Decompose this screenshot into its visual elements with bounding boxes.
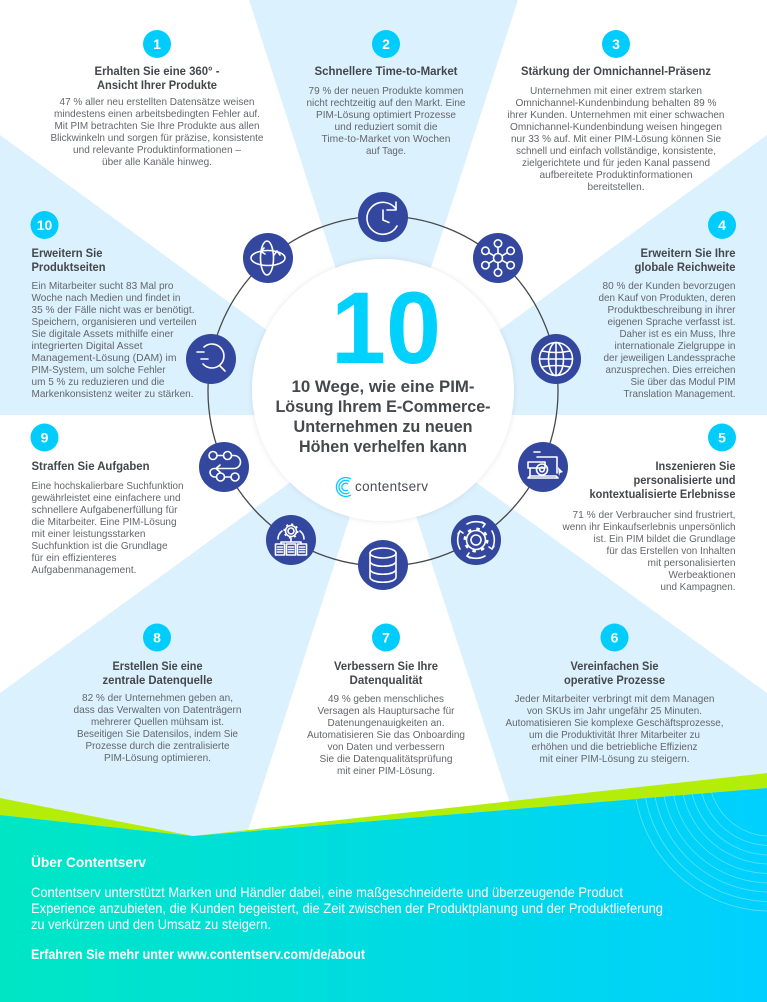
panel: 6: [506, 624, 724, 765]
body 2: auf Tage.: [366, 145, 406, 157]
badge 6: [600, 624, 628, 652]
badge 3: [602, 30, 630, 58]
main title: Höhen verhelfen kann: [299, 437, 467, 456]
badge 2: [372, 30, 400, 58]
panel: 4: [598, 211, 736, 400]
body 2: Time-to-Market von Wochen: [322, 133, 451, 145]
body 5: Werbeaktionen: [668, 569, 736, 581]
body 10: 35 % der Fälle nicht was er benötigt.: [32, 304, 194, 316]
heading 1: [94, 64, 220, 92]
heading 6: Vereinfachen Sie: [570, 659, 659, 673]
body 7: Datenungenauigkeiten an.: [328, 717, 444, 729]
badge 10: [30, 211, 58, 239]
body 3: Unternehmen mit einer extrem starken: [530, 85, 702, 97]
body 8: mehrerer Quellen mühsam ist.: [91, 716, 224, 728]
body 5: wenn ihr Einkaufserlebnis unpersönlich: [562, 521, 736, 533]
badge 5: [708, 424, 736, 452]
body 9: schnellere Aufgabenerfüllung für: [32, 504, 178, 516]
heading 4: Erweitern Sie Ihre: [640, 246, 736, 260]
badge 1: [143, 30, 171, 58]
icon: clock: [358, 192, 408, 242]
main title: 10 Wege, wie eine PIM-: [292, 377, 474, 396]
body 5: 71 % der Verbraucher sind frustriert,: [572, 509, 736, 521]
body 8: 82 % der Unternehmen geben an,: [82, 692, 233, 704]
badge 7: 7: [382, 630, 390, 646]
body 2: und reduziert somit die: [334, 121, 438, 133]
panel: 1: [50, 30, 264, 168]
body 5: [562, 509, 736, 593]
heading 10: Erweitern Sie: [32, 246, 103, 260]
body 3: schnell und einfach vollständige, konsistente,: [516, 145, 716, 157]
heading 5: kontextualisierte Erlebnisse: [590, 487, 736, 501]
panel: 8: [74, 624, 242, 764]
footer paragraph: Contentserv unterstützt Marken und Händler dabei, eine maßgeschneiderte und überzeugende Product: [31, 884, 623, 900]
footer text: [31, 854, 663, 962]
body 8: [74, 692, 242, 764]
body 6: um die Produktivität Ihrer Mitarbeiter zu: [529, 729, 700, 741]
body 9: mit einer leistungsstarken: [32, 528, 146, 540]
heading 6: operative Prozesse: [564, 673, 665, 687]
heading 8: zentrale Datenquelle: [102, 673, 213, 687]
icon: gear process: [451, 515, 501, 565]
body 9: Eine hochskalierbare Suchfunktion: [32, 480, 184, 492]
body 5: mit personalisierten: [648, 557, 736, 569]
body 7: Automatisieren Sie das Onboarding: [307, 729, 465, 741]
body 4: Produktbeschreibung in ihrer: [608, 304, 736, 316]
badge 1: 1: [153, 36, 161, 52]
body 9: gewährleistet eine einfachere und: [32, 492, 181, 504]
main title: Unternehmen zu neuen: [294, 417, 472, 436]
body 7: Versagen als Hauptursache für: [318, 705, 455, 717]
body 4: internationale Zielgruppe in: [614, 340, 736, 352]
body 9: Suchfunktion ist die Grundlage: [32, 540, 168, 552]
body 4: anzusprechen. Dies erreichen: [606, 364, 736, 376]
main title: Lösung Ihrem E-Commerce-: [276, 397, 490, 416]
heading 2: Schnellere Time-to-Market: [314, 64, 458, 78]
body 1: [50, 96, 264, 168]
badge 9: [30, 424, 58, 452]
heading 7: [334, 659, 438, 687]
body 6: von SKUs im Jahr ungefähr 25 Minuten.: [527, 705, 702, 717]
heading 7: Verbessern Sie Ihre: [334, 659, 438, 673]
body 7: mit einer PIM-Lösung.: [337, 765, 435, 777]
body 8: Prozesse durch die zentralisierte: [86, 740, 230, 752]
body 3: zielgerichtete und für jeden Kanal passend: [522, 157, 710, 169]
body 8: PIM-Lösung optimieren.: [104, 752, 211, 764]
body 7: Sie die Datenqualitätsprüfung: [320, 753, 453, 765]
body 2: [306, 85, 466, 157]
body 2: PIM-Lösung optimiert Prozesse: [316, 109, 456, 121]
body 1: Blickwinkeln und sorgen für präzise, konsistente: [50, 132, 264, 144]
body 9: für ein effizienteres: [32, 552, 116, 564]
heading 5: [590, 459, 736, 501]
badge 5: 5: [718, 430, 726, 446]
body 3: ihrer Kunden. Unternehmen mit einer schwachen: [508, 109, 725, 121]
body 3: bereitstellen.: [588, 181, 644, 193]
badge 8: 8: [153, 630, 161, 646]
body 2: nicht rechtzeitig auf den Markt. Eine: [306, 97, 466, 109]
body 4: der jeweiligen Landessprache: [604, 352, 736, 364]
heading 4: [634, 246, 736, 274]
heading 1: Ansicht Ihrer Produkte: [97, 78, 217, 92]
body 10: Woche nach Medien und findet in: [32, 292, 181, 304]
main title: [276, 377, 490, 456]
badge 7: [372, 624, 400, 652]
icon: network: [473, 233, 523, 283]
body 6: Automatisieren Sie komplexe Geschäftsprozesse,: [506, 717, 724, 729]
body 3: [508, 85, 725, 193]
heading 3: Stärkung der Omnichannel-Präsenz: [521, 64, 711, 78]
panel: 5: [562, 424, 736, 593]
contentserv logo: [336, 478, 428, 496]
body 10: Ein Mitarbeiter sucht 83 Mal pro: [32, 280, 174, 292]
body 6: [506, 693, 724, 765]
body 4: Translation Management.: [624, 388, 736, 400]
contentserv logo: contentserv: [355, 479, 428, 494]
badge 2: 2: [382, 36, 390, 52]
body 1: und relevante Produktinformationen –: [73, 144, 241, 156]
body 7: 49 % geben menschliches: [328, 693, 444, 705]
body 4: Sie über das Modul PIM: [630, 376, 736, 388]
badge 8: [143, 624, 171, 652]
panel: 2: [306, 30, 466, 157]
body 5: für das Erstellen von Inhalten: [606, 545, 736, 557]
badge 4: 4: [718, 217, 726, 233]
body 1: Mit PIM betrachten Sie Ihre Produkte aus allen: [54, 120, 260, 132]
heading 8: Erstellen Sie eine: [112, 659, 203, 673]
body 10: Sie digitale Assets mithilfe einer: [32, 328, 174, 340]
body 6: erhöhen und die betriebliche Effizienz: [532, 741, 698, 753]
body 7: von Daten und verbessern: [328, 741, 445, 753]
body 4: 80 % der Kunden bevorzugen: [602, 280, 736, 292]
body 3: Omnichannel-Kundenbindung behalten 89 %: [516, 97, 716, 109]
body 6: Jeder Mitarbeiter verbringt mit dem Managen: [514, 693, 715, 705]
icon: central data source: [266, 515, 316, 565]
panel: 9: [30, 424, 184, 576]
heading 9: Straffen Sie Aufgaben: [32, 459, 150, 473]
body 10: Speichern, organisieren und verteilen: [32, 316, 197, 328]
body 3: aufbereitete Produktinformationen: [540, 169, 693, 181]
body 8: dass das Verwalten von Datenträgern: [74, 704, 242, 716]
body 4: Daher ist es ein Muss, Ihre: [620, 328, 736, 340]
badge 3: 3: [612, 36, 620, 52]
body 5: ist. Ein PIM bildet die Grundlage: [594, 533, 736, 545]
body 10: PIM-System, um solche Fehler: [32, 364, 166, 376]
icon: 360 view: [243, 233, 293, 283]
big number 10: 10: [331, 271, 441, 385]
icon: globe: [531, 334, 581, 384]
body 4: [598, 280, 736, 400]
body 1: mindestens einen arbeitsbedingten Fehler auf.: [54, 108, 260, 120]
footer paragraph: [31, 884, 663, 932]
body 10: Management-Lösung (DAM) im: [32, 352, 177, 364]
panel: 10: [30, 211, 197, 400]
panel: 3: [508, 30, 725, 193]
center circle: [252, 259, 514, 521]
body 9: [32, 480, 184, 576]
heading 5: personalisierte und: [634, 473, 736, 487]
body 3: nur 33 % auf. Mit einer PIM-Lösung können Sie: [511, 133, 721, 145]
footer paragraph: Experience anzubieten, die Kunden begeistert, die Zeit zwischen der Produktplanung und der Produktlieferung: [31, 900, 663, 916]
ring: [208, 216, 558, 566]
body 8: Beseitigen Sie Datensilos, indem Sie: [77, 728, 238, 740]
badge 9: 9: [41, 430, 49, 446]
body 6: mit einer PIM-Lösung zu steigern.: [540, 753, 690, 765]
body 3: Omnichannel-Kundenbindung weisen hingegen: [510, 121, 722, 133]
badge 4: [708, 211, 736, 239]
panel: 7: [307, 624, 465, 777]
badge 10: 10: [37, 217, 52, 233]
body 10: integrierten Digital Asset: [32, 340, 143, 352]
heading 5: Inszenieren Sie: [656, 459, 736, 473]
footer link: Erfahren Sie mehr unter www.contentserv.com/de/about: [31, 946, 365, 962]
icon: database: [358, 540, 408, 590]
footer band: [0, 773, 767, 1002]
heading 6: [564, 659, 665, 687]
body 1: 47 % aller neu erstellten Datensätze weisen: [60, 96, 255, 108]
heading 1: Erhalten Sie eine 360° -: [94, 64, 220, 78]
heading 10: Produktseiten: [32, 260, 106, 274]
badge 6: 6: [611, 630, 619, 646]
icon: workflow: [199, 442, 249, 492]
body 4: den Kauf von Produkten, deren: [598, 292, 736, 304]
body 9: Aufgabenmanagement.: [32, 564, 136, 576]
heading 7: Datenqualität: [350, 673, 422, 687]
heading 10: [32, 246, 106, 274]
body 10: [32, 280, 197, 400]
footer heading: Über Contentserv: [31, 854, 146, 870]
body 9: die Mitarbeiter. Eine PIM-Lösung: [32, 516, 177, 528]
body 2: 79 % der neuen Produkte kommen: [308, 85, 464, 97]
body 7: [307, 693, 465, 777]
icon: personalized screen: [518, 442, 568, 492]
icon: search: [186, 334, 236, 384]
body 1: über alle Kanäle hinweg.: [102, 156, 212, 168]
body 10: Markenkonsistenz weiter zu stärken.: [32, 388, 194, 400]
heading 8: [102, 659, 213, 687]
body 5: und Kampagnen.: [660, 581, 736, 593]
body 4: eigenen Sprache verfasst ist.: [608, 316, 736, 328]
heading 4: globale Reichweite: [634, 260, 736, 274]
body 10: um 5 % zu reduzieren und die: [32, 376, 165, 388]
footer paragraph: zu verkürzen und den Umsatz zu steigern.: [31, 916, 271, 932]
